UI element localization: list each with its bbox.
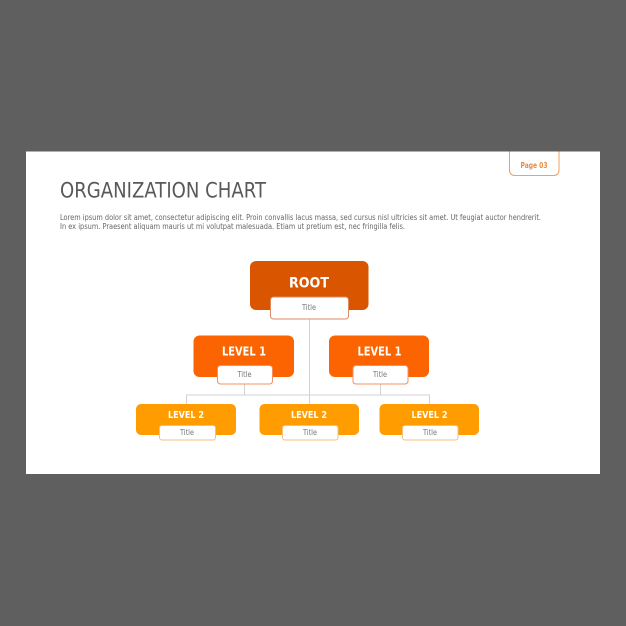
node: level 1 right: LEVEL 1	[358, 344, 402, 358]
title: ORGANIZATION CHART	[60, 178, 266, 202]
node: level 1 left: LEVEL 1	[222, 344, 266, 358]
node: level 2 middle: Title	[302, 428, 317, 437]
node: level 2 middle: LEVEL 2	[291, 410, 327, 421]
node: root: Title	[301, 303, 316, 312]
body text	[60, 213, 541, 231]
node: level 1 left	[194, 336, 294, 384]
node: level 2 right: Title	[422, 428, 437, 437]
body text: In ex ipsum. Praesent aliquam mauris ut mi volutpat malesuada. Etiam ut pretium est, nec fringilla felis.	[60, 222, 405, 231]
node: level 1 left: Title	[237, 370, 252, 379]
node: root	[250, 261, 368, 319]
node: level 2 middle	[260, 404, 359, 440]
node: level 2 left: LEVEL 2	[168, 410, 204, 421]
node: level 2 left	[136, 404, 236, 440]
page tab: Page 03	[520, 161, 548, 170]
node: root: ROOT	[289, 276, 329, 292]
node: level 1 right: Title	[372, 370, 387, 379]
page tab	[510, 152, 559, 176]
connector lines	[186, 319, 430, 404]
node: level 2 right: LEVEL 2	[412, 410, 448, 421]
node: level 2 right	[380, 404, 479, 440]
node: level 1 right	[329, 336, 429, 384]
node: level 2 left: Title	[179, 428, 194, 437]
panel: slide	[26, 152, 600, 474]
